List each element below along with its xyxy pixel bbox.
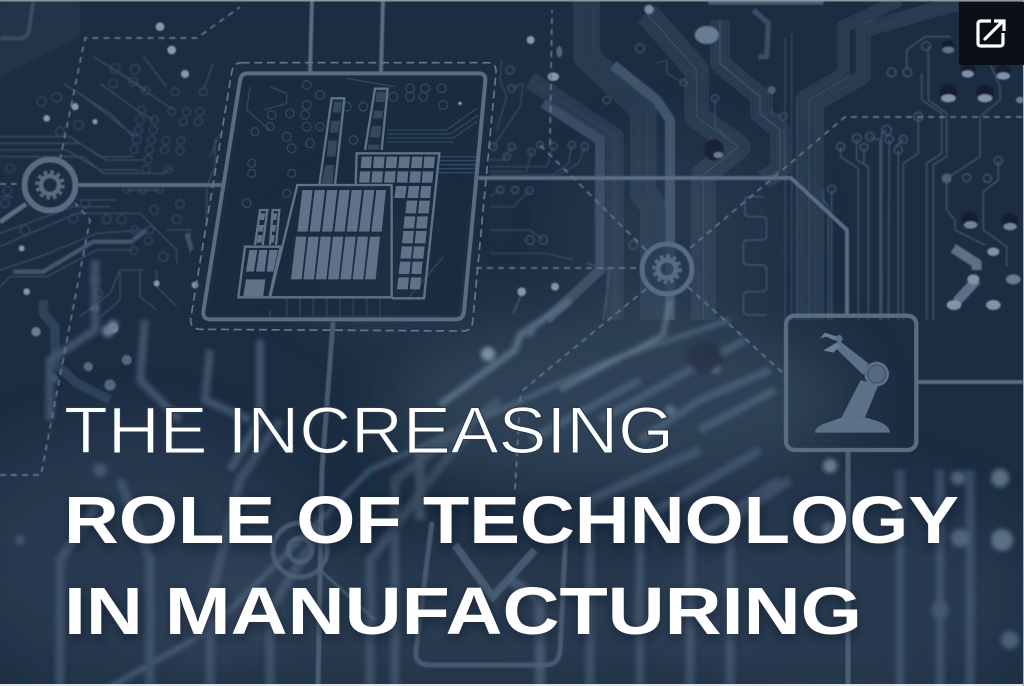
title line 2: ROLE OF TECHNOLOGY xyxy=(64,483,959,558)
title line 1: THE INCREASING xyxy=(64,393,674,467)
open-in-new button xyxy=(959,2,1024,65)
traces: out of focus lower area xyxy=(15,260,1019,686)
traces: centre group xyxy=(490,0,830,320)
title xyxy=(64,393,959,649)
traces: left group xyxy=(0,0,220,400)
traces: right group xyxy=(803,0,1024,320)
chip frame xyxy=(203,73,485,319)
factory building outlines xyxy=(238,89,439,298)
icon: factory chip xyxy=(191,63,496,331)
icon: external link xyxy=(978,21,1004,46)
icon: lower gear node xyxy=(273,523,375,620)
title shadow: ROLE OF TECHNOLOGY xyxy=(66,486,959,562)
robot arm xyxy=(815,333,890,433)
chip interior xyxy=(210,78,480,317)
title shadow xyxy=(66,486,959,653)
title shadow: IN MANUFACTURING xyxy=(66,577,861,653)
dashed network lines xyxy=(0,7,1023,490)
title line 3: IN MANUFACTURING xyxy=(64,574,862,649)
dashed chip outline xyxy=(191,63,496,331)
glow over lower area xyxy=(0,140,1024,686)
icon: centre gear node xyxy=(642,244,692,294)
icon: left gear node xyxy=(24,160,76,210)
icon: robot arm box xyxy=(786,316,916,450)
factory windows xyxy=(243,92,435,296)
icon: wrench box xyxy=(416,522,566,665)
